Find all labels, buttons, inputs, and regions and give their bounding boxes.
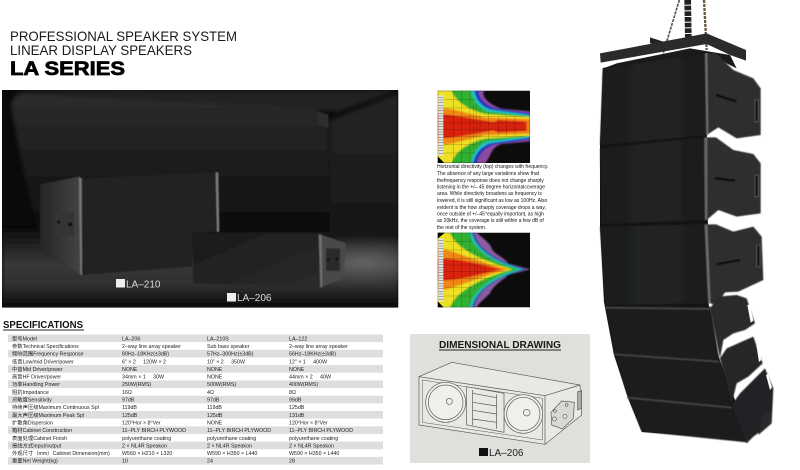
table: specifications: 11–PLY BIRCH PLYWOOD xyxy=(289,428,353,434)
table: specifications: 400W(RMS) xyxy=(289,382,318,388)
title: professional speaker system: LA SERIES xyxy=(10,59,125,80)
table: specifications: 80Hz–18KHz(±3dB) xyxy=(122,352,169,358)
table: specifications xyxy=(8,334,383,465)
table: specifications: 97dB xyxy=(122,398,135,404)
text block: directivity description: area. While directivity broadens as frequency is xyxy=(437,191,542,197)
table: specifications: 型号Model xyxy=(12,334,37,342)
table: specifications: 28 xyxy=(289,459,295,465)
table: specifications: Sub bass speaker xyxy=(207,344,250,350)
table: specifications: 高音HF Driver/power xyxy=(12,373,61,381)
table: specifications: 表面处理Cabinet Finish xyxy=(12,434,67,442)
table: specifications: 2 × NL4R Speakon xyxy=(122,443,167,449)
table: specifications: 131dB xyxy=(289,413,305,419)
top cabinets xyxy=(600,53,761,224)
table: specifications: 2–way line array speaker xyxy=(289,344,348,350)
text block: directivity description: evident is the how sharply coverage drops a way, xyxy=(437,205,546,211)
illustration: hanging line array speaker system xyxy=(600,0,773,443)
chart: horizontal directivity heat map xyxy=(438,91,530,163)
text block: directivity description: thefrequency response does not change sharply xyxy=(437,178,544,184)
table: specifications: 灵敏度Sensitivity xyxy=(12,396,52,404)
diagram: LA-206 line drawing xyxy=(419,362,582,444)
table: specifications: 参数Technical Specifications xyxy=(12,342,79,350)
table: specifications: 6" × 2 120W × 2 xyxy=(122,359,166,365)
table: specifications: W590 × H350 × L440 xyxy=(289,451,339,457)
table: specifications: 频响范围Frequency Response xyxy=(12,350,84,358)
table: specifications: 10 xyxy=(122,459,128,465)
table: specifications: 低音Low/mid Driver/power xyxy=(12,357,74,365)
table: specifications: 119dB xyxy=(207,405,222,411)
table: specifications: NONE xyxy=(289,367,305,373)
table: specifications: 扩散角Dispersion xyxy=(12,418,53,426)
heading: dimensional drawing: DIMENSIONAL DRAWING xyxy=(439,339,561,351)
table: specifications: 箱材Cabinet Construction xyxy=(12,426,72,434)
table: specifications: 最大声压级Maximum Peak Spl xyxy=(12,411,84,419)
table: specifications: 125dB xyxy=(289,405,305,411)
table: specifications: 中音Mid Driver/power xyxy=(12,365,63,373)
table: specifications: 外观尺寸（mm）Cabinet Dimension(mm) xyxy=(12,449,110,457)
table: specifications: 2–way line array speaker xyxy=(122,344,181,350)
table: specifications: LA–210S xyxy=(207,336,229,342)
table: specifications: 57Hz–300Hz(±3dB) xyxy=(207,352,254,358)
table: specifications: 24 xyxy=(207,459,213,465)
table: specifications: LA–206 xyxy=(122,336,140,342)
table: specifications: 12" × 1 400W xyxy=(289,359,327,365)
title: professional speaker system xyxy=(10,28,237,80)
table: specifications: 4Ω xyxy=(207,390,214,396)
table: specifications: 120°Hor × 8°Ver xyxy=(122,420,161,426)
table: specifications: NONE xyxy=(207,375,223,381)
table: specifications: NONE xyxy=(122,367,138,373)
table: specifications: W560 × H210 × L320 xyxy=(122,451,172,457)
table: specifications: LA–122 xyxy=(289,336,307,342)
rigging chains and frame xyxy=(600,0,746,68)
table: specifications: 8Ω xyxy=(289,390,296,396)
table: specifications: 持续声压级Maximum Continuous Spl xyxy=(12,403,99,411)
table: specifications: 10" × 2 350W xyxy=(207,359,245,365)
table: specifications: W590 × H350 × L440 xyxy=(207,451,257,457)
text block: directivity description: The absence of any large variations show that xyxy=(437,171,540,177)
panel: product photo of LA-210 and LA-206 xyxy=(2,90,398,308)
lower cabinets xyxy=(600,224,763,442)
label: LA-210: LA–210 xyxy=(126,280,161,290)
panel: dimensional drawing xyxy=(410,334,590,463)
table: specifications: 99dB xyxy=(289,398,302,404)
text block: directivity description: Horizontal directivity (top) changes with frequency. xyxy=(437,164,548,170)
table: specifications: 16Ω xyxy=(122,390,132,396)
chart: vertical directivity heat map xyxy=(438,233,530,307)
table: specifications: 125dB xyxy=(207,413,223,419)
table: specifications: 44mm × 2 40W xyxy=(289,375,331,381)
table: specifications: NONE xyxy=(207,420,223,426)
table: specifications: 125dB xyxy=(122,413,138,419)
label: LA-206: LA–206 xyxy=(237,293,272,304)
table: specifications: 接线方式Input/output xyxy=(12,441,62,449)
side rigging and handles of lower cabinets xyxy=(710,295,773,443)
table: specifications: 56Hz–18KHz(±3dB) xyxy=(289,352,336,358)
table: specifications: 阻抗Impedance xyxy=(12,388,49,396)
table: specifications: polyurethane coating xyxy=(207,436,256,442)
table: specifications: polyurethane coating xyxy=(289,436,338,442)
table: specifications: 119dB xyxy=(122,405,137,411)
text block: directivity description xyxy=(437,164,548,231)
table: specifications: polyurethane coating xyxy=(122,436,171,442)
table: specifications: 11–PLY BIRCH PLYWOOD xyxy=(207,428,271,434)
title: professional speaker system: PROFESSIONAL SPEAKER SYSTEM xyxy=(10,28,237,44)
heading: specifications: SPECIFICATIONS xyxy=(3,319,83,331)
text block: directivity description: once outside of +/–45°equally important, as high xyxy=(437,212,544,218)
text block: directivity description: listening in the +/– 45 degree horizontalcoverage xyxy=(437,184,545,190)
LA-206 speaker xyxy=(193,233,346,287)
label: LA-206: LA–206 xyxy=(489,448,524,459)
LA-210 speaker xyxy=(40,172,219,275)
table: specifications: NONE xyxy=(207,367,223,373)
table: specifications: 功率Handling Power xyxy=(12,380,60,388)
table: specifications: 重量Net Weight(kg) xyxy=(12,457,58,465)
table: specifications: 97dB xyxy=(207,398,220,404)
table: specifications: 2 × NL4R Speakon xyxy=(289,443,334,449)
table: specifications: 11–PLY BIRCH PLYWOOD xyxy=(122,428,186,434)
table: specifications: 34mm × 1 30W xyxy=(122,375,164,381)
text block: directivity description: the rest of the system. xyxy=(437,225,486,231)
title: professional speaker system: LINEAR DISPLAY SPEAKERS xyxy=(10,42,192,58)
table: specifications: 500W(RMS) xyxy=(207,382,236,388)
table: specifications: 120°Hor × 8°Ver xyxy=(289,420,328,426)
dark backing behind cabinets xyxy=(600,53,748,440)
text block: directivity description: lowered, it is still significant as low as 100Hz. Also xyxy=(437,198,548,204)
table: specifications: 250W(RMS) xyxy=(122,382,151,388)
text block: directivity description: as 20kHz, the coverage is still within a few dB of xyxy=(437,218,544,224)
table: specifications: 2 × NL4R Speakon xyxy=(207,443,252,449)
